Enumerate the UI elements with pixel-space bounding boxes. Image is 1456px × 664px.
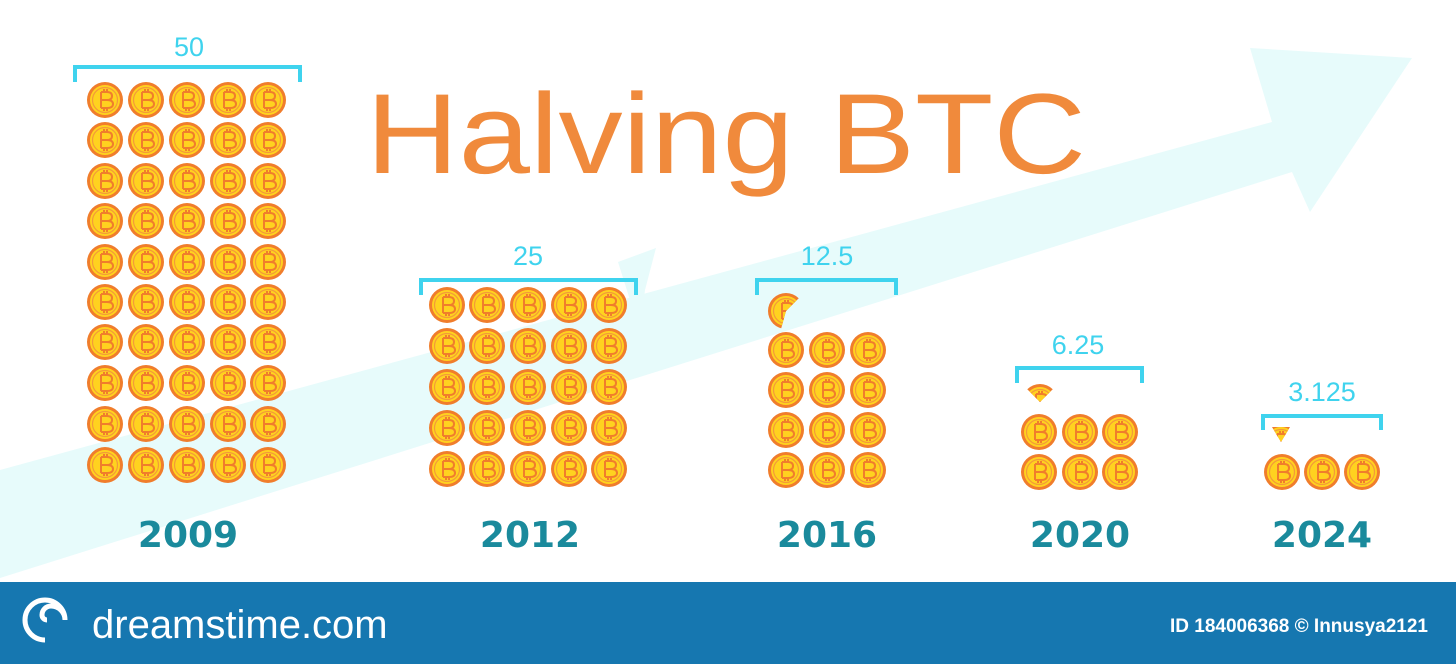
bracket 2009 <box>75 67 300 82</box>
label 50: 50 <box>174 32 204 62</box>
partial coin 2016 <box>768 293 799 328</box>
bracket 2020 <box>1017 368 1142 383</box>
partial coin 2020 <box>1027 384 1053 402</box>
year 2024: 2024 <box>1272 515 1372 556</box>
background arrow <box>0 48 1412 578</box>
column: 2024 <box>1263 377 1381 556</box>
label 3.125: 3.125 <box>1288 377 1356 407</box>
coins 2016 <box>768 332 886 488</box>
label 25: 25 <box>513 241 543 271</box>
coins 2020 <box>1021 414 1138 490</box>
footer logo text: dreamstime.com <box>92 603 388 647</box>
partial coin 2024 <box>1272 427 1290 442</box>
coins 2009 <box>87 82 286 483</box>
year 2016: 2016 <box>777 515 877 556</box>
coins 2012 <box>429 287 627 487</box>
bracket 2024 <box>1263 416 1381 430</box>
label 12.5: 12.5 <box>801 241 853 271</box>
bracket 2016 <box>757 280 896 295</box>
footer band <box>0 582 1456 664</box>
icon: dreamstime spiral <box>25 600 65 640</box>
coins 2024 <box>1264 454 1380 490</box>
year 2012: 2012 <box>480 515 580 556</box>
column: 2012 <box>421 241 636 556</box>
column: 2009 <box>75 32 300 556</box>
year 2020: 2020 <box>1030 515 1130 556</box>
year 2009: 2009 <box>138 515 238 556</box>
title: Halving BTC <box>366 71 1086 198</box>
column: 2020 <box>1017 330 1142 556</box>
label 6.25: 6.25 <box>1052 330 1104 360</box>
bracket 2012 <box>421 280 636 295</box>
footer credit: ID 184006368 © Innusya2121 <box>1170 616 1428 637</box>
column: 2016 <box>757 241 896 556</box>
